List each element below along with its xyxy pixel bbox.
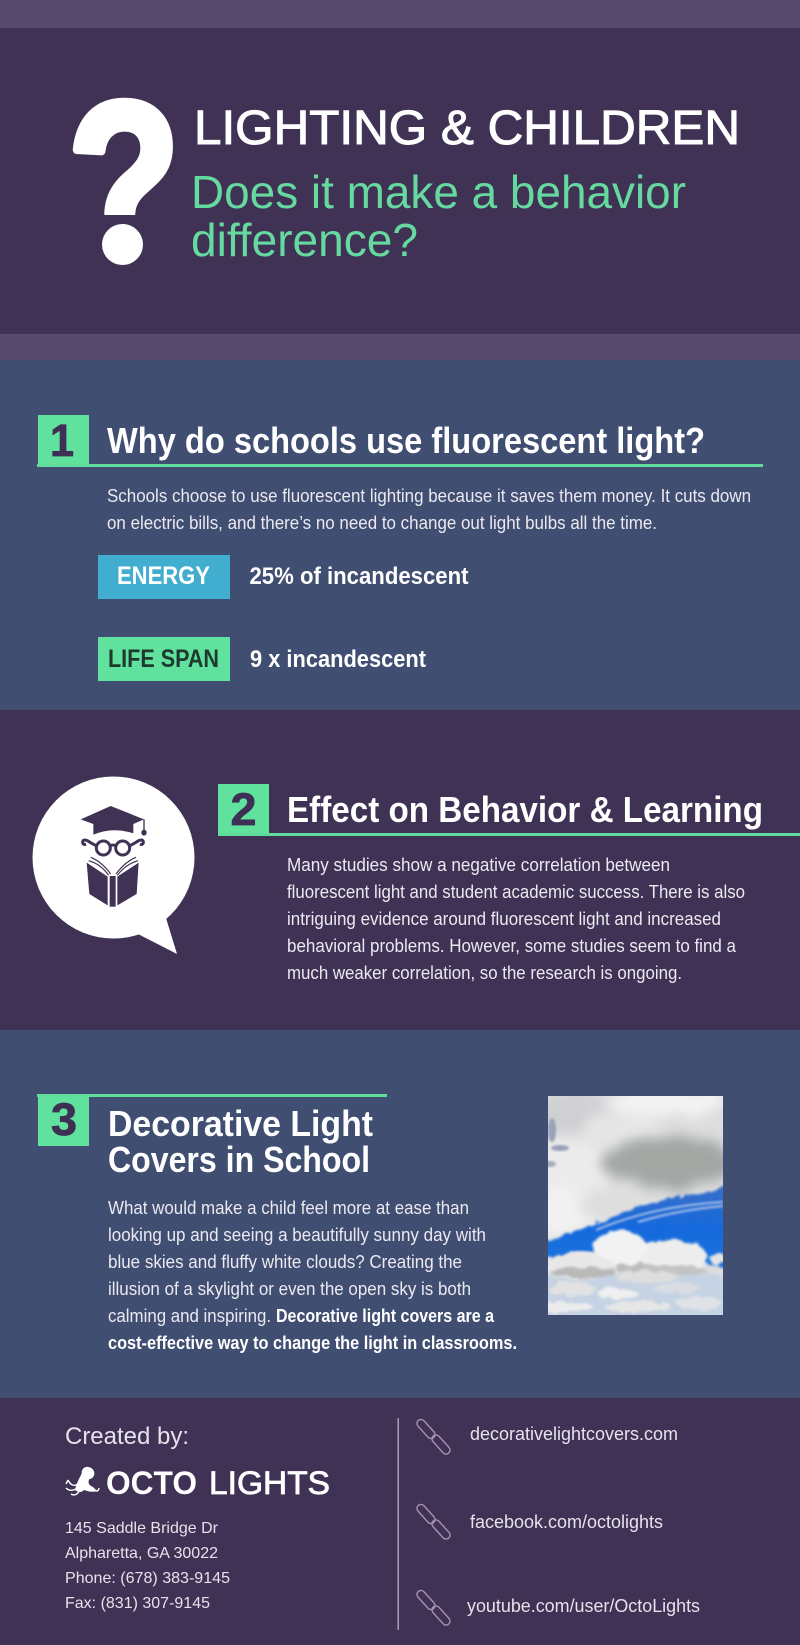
panel: footer [0,1398,800,1645]
paragraph 2: much weaker correlation, so the research is ongoing. [287,963,682,983]
stat: life span: LIFE SPAN [108,645,219,673]
paragraph 3: looking up and seeing a beautifully sunny day with [108,1225,486,1245]
heading 3 [108,1103,373,1180]
paragraph 3: Decorative light covers are a [276,1306,495,1326]
icon: chain link [415,1418,452,1456]
link: facebook: facebook.com/octolights [470,1512,663,1532]
paragraph 3: illusion of a skylight or even the open sky is both [108,1279,471,1299]
paragraph 3: cost-effective way to change the light in classrooms. [108,1333,517,1353]
number badge 3 [38,1094,89,1146]
subtitle: difference? [191,214,418,266]
stat: life span: 9 x incandescent [250,646,426,673]
link: youtube: youtube.com/user/OctoLights [467,1596,700,1616]
heading 2: Effect on Behavior & Learning [287,789,763,830]
panel: section 3 decorative light covers [0,1030,800,1398]
icon: chain link [415,1503,452,1541]
link: youtube [415,1589,700,1627]
panel: header [0,0,800,360]
icon: question mark: ? [68,56,180,308]
heading 3: Decorative Light [108,1103,373,1144]
icon: question mark [72,98,173,265]
logo: octo lights: LIGHTS [209,1465,330,1501]
paragraph 1: Schools choose to use fluorescent lighting because it saves them money. It cuts down [107,486,751,506]
link: website: decorativelightcovers.com [470,1424,678,1444]
stat: energy [98,555,468,599]
stat: life span [98,637,426,681]
icon: chain link [415,1589,452,1627]
number badge 1 [38,415,89,467]
subtitle: Does it make a behavior [191,166,686,218]
address block: 145 Saddle Bridge Dr [65,1520,219,1537]
paragraph 1: on electric bills, and there’s no need to change out light bulbs all the time. [107,513,657,533]
number badge 2: 2 [230,784,256,835]
paragraph 3: blue skies and fluffy white clouds? Creating the [108,1252,462,1272]
number badge 3: 3 [51,1094,77,1145]
address block [65,1520,230,1612]
paragraph 2: behavioral problems. However, some studies seem to find a [287,936,737,956]
address block: Fax: (831) 307-9145 [65,1595,210,1612]
number badge 2 [218,784,269,836]
paragraph 2: Many studies show a negative correlation between [287,855,670,875]
created by label: Created by: [65,1423,189,1450]
heading 3: Covers in School [108,1139,370,1180]
address block: Phone: (678) 383-9145 [65,1570,230,1587]
panel: section 1 fluorescent light [0,360,800,710]
subtitle [191,166,686,266]
number badge 1: 1 [50,415,74,466]
paragraph 2: fluorescent light and student academic success. There is also [287,882,745,902]
link: facebook [415,1503,663,1541]
icon: octopus [66,1464,99,1495]
paragraph 3: What would make a child feel more at ease than [108,1198,469,1218]
address block: Alpharetta, GA 30022 [65,1545,218,1562]
panel: section 2 behavior and learning [0,710,800,1030]
title: LIGHTING & CHILDREN [194,102,740,155]
paragraph 2 [287,855,745,983]
logo: octo lights [66,1464,330,1501]
paragraph 2: intriguing evidence around fluorescent light and increased [287,909,721,929]
logo: octo lights: OCTO [106,1465,197,1501]
paragraph 1 [107,486,751,533]
paragraph 3 [108,1198,517,1353]
image: sky with clouds [548,1096,723,1315]
heading 1: Why do schools use fluorescent light? [107,420,705,461]
paragraph 3: calming and inspiring. [108,1306,271,1326]
stat: energy: 25% of incandescent [250,563,468,590]
stat: energy: ENERGY [117,562,210,590]
icon: speech bubble with scholar [32,776,194,954]
link: website [415,1418,678,1456]
